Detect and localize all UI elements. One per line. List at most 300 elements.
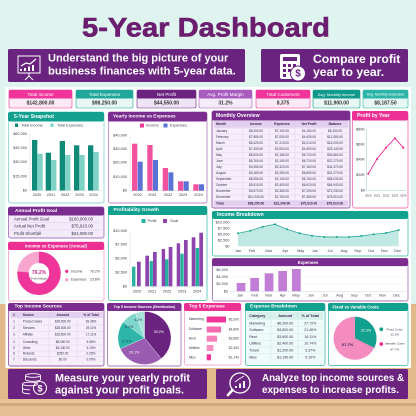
- axis labels: Feb: [249, 249, 255, 253]
- table: 5.10%: [305, 355, 316, 359]
- table: $28,600.00: [55, 326, 71, 330]
- banner: compare profit: Compare profit: [313, 52, 400, 66]
- table: $2,280.00: [275, 171, 289, 175]
- axis labels: 2022: [383, 193, 390, 197]
- panel: expense breakdown: Expense Breakdown: [250, 304, 297, 310]
- table: February: [216, 135, 229, 139]
- axis labels: 2023: [178, 289, 186, 293]
- KPI: total customers: [256, 90, 310, 108]
- banner: big picture: [8, 49, 245, 82]
- axis labels: Sep: [351, 294, 358, 298]
- table: $2,150.00: [275, 159, 289, 163]
- panel: yearly income vs expenses: Yearly Income vs Expenses: [113, 113, 176, 119]
- KPI: average monthly income: [313, 90, 360, 108]
- axis labels: 2021: [148, 193, 157, 197]
- legend: [142, 219, 178, 223]
- panel: expense breakdown: [245, 303, 325, 366]
- table: September: [216, 177, 231, 181]
- axis labels: $2,500: [115, 270, 127, 274]
- axis labels: 2020: [133, 289, 141, 293]
- legend: Expenses: [71, 278, 87, 282]
- panel: fixed vs variable costs: [328, 303, 408, 366]
- table: Marketing: [249, 321, 265, 325]
- table: $9,670.00: [249, 189, 263, 193]
- table: $4,130.00: [56, 346, 70, 350]
- table: Services: [23, 326, 35, 330]
- table: 21.46%: [304, 328, 317, 332]
- axis labels: Dec: [393, 294, 400, 298]
- axis labels: 2020: [365, 193, 372, 197]
- legend: Income: [146, 124, 159, 128]
- table: 7: [13, 358, 15, 362]
- KPI: net profit: Net Profit: [157, 92, 177, 97]
- table: $4,150.00: [302, 129, 316, 133]
- table: $6,760.00: [302, 177, 316, 181]
- panel: top income sources: Top Income Sources: [14, 304, 62, 310]
- axis labels: 2022: [61, 193, 69, 197]
- panel: income vs expenses donut: Income vs Expenses (Annual): [25, 244, 88, 248]
- panel: top 5 expenses: Top 5 Expenses: [189, 304, 225, 310]
- panel: fixed vs variable costs: Fixed vs Variable Costs: [332, 304, 379, 310]
- table: Other: [23, 346, 31, 350]
- axis labels: $40K: [356, 158, 365, 162]
- table: % of Total: [302, 314, 319, 318]
- table: $51,270.00: [327, 171, 343, 175]
- banner: compare profit: [261, 49, 408, 82]
- table: $2,760.00: [275, 195, 289, 199]
- table: 3: [13, 333, 15, 337]
- axis labels: $30,000: [13, 160, 27, 164]
- panel: 5-year snapshot: [8, 112, 104, 203]
- pie chart: 39.2%: [154, 330, 165, 334]
- axis labels: 2023: [392, 193, 399, 197]
- table: $16,800.00: [55, 333, 71, 337]
- panel: top 5 income sources pie: Top 5 Income Sources (Distribution): [114, 305, 176, 309]
- table: Balance: [329, 122, 341, 126]
- bar chart: expenses by category: $1,140: [229, 355, 239, 359]
- table: Amount: [278, 314, 293, 318]
- table: $8,420.00: [249, 141, 263, 145]
- axis labels: 2021: [374, 193, 381, 197]
- axis labels: [113, 229, 202, 293]
- table: 9.06%: [87, 340, 96, 344]
- table: $2,185.00: [275, 153, 289, 157]
- table: $2,400.00: [275, 183, 289, 187]
- banner: analyze income and expenses: expenses to increase profits.: [262, 385, 399, 396]
- table: Misc: [249, 355, 257, 359]
- table: 10.74%: [304, 342, 317, 346]
- bar chart: expenses by category: Rent: [189, 337, 196, 341]
- table: $4,500.00: [302, 147, 316, 151]
- panel: expenses: [212, 258, 408, 301]
- axis labels: [356, 128, 407, 197]
- axis labels: 2024: [193, 289, 202, 293]
- table: July: [216, 165, 222, 169]
- KPI: total customers: Total Customers: [266, 92, 300, 97]
- panel: profit by year: Profit by Year: [357, 113, 390, 119]
- title: 5-Year Dashboard: [82, 13, 330, 42]
- axis labels: Jun: [308, 294, 314, 298]
- legend: Fixed Costs: [387, 327, 403, 331]
- icon: magnifier with chart: [228, 373, 250, 395]
- panel: annual profit goal: Profit Shortfall: [14, 231, 41, 236]
- icon: calculator with dollar coin: [280, 54, 306, 81]
- axis labels: $40,000: [113, 134, 127, 138]
- table: Travel: [249, 348, 259, 352]
- table: $37,270.00: [327, 159, 343, 163]
- axis labels: $5,000: [115, 256, 127, 260]
- axis labels: $4,000: [216, 275, 228, 279]
- panel: income breakdown: [212, 211, 408, 256]
- table: 1: [13, 320, 15, 324]
- KPI: average monthly income: $11,900.00: [324, 100, 349, 106]
- panel: annual profit goal: $100,000.00: [69, 216, 94, 222]
- axis labels: 2020: [33, 193, 41, 197]
- table: $9,510.00: [249, 183, 263, 187]
- axis labels: $0: [123, 284, 127, 288]
- axis labels: $60K: [356, 143, 365, 147]
- table: $2,400.00: [277, 342, 293, 346]
- table: August: [216, 171, 226, 175]
- axis labels: $45,000: [13, 146, 27, 150]
- table: $75,910.00: [327, 195, 343, 199]
- table: 0.00%: [87, 358, 96, 362]
- table: $98,250.00: [248, 201, 264, 205]
- axis labels: Oct: [368, 249, 375, 253]
- table: $7,480.00: [302, 195, 316, 199]
- KPI: net profit: $44,550.00: [154, 100, 179, 106]
- KPI: average profit margin: 31.2%: [218, 100, 233, 106]
- table: $2,380.00: [275, 189, 289, 193]
- table: $58,030.00: [327, 177, 343, 181]
- pie chart: 29.1%: [129, 351, 140, 355]
- bar chart: expenses by category: Marketing: [189, 317, 204, 321]
- legend: [15, 123, 83, 127]
- table: 2: [13, 326, 15, 330]
- table: $9,180.00: [249, 171, 263, 175]
- panel: income vs expenses donut: [8, 242, 104, 301]
- table: 0.25%: [87, 352, 96, 356]
- table: Source: [23, 313, 34, 317]
- table: $2,000.00: [275, 147, 289, 151]
- KPI: average monthly expenses: $8,187.50: [374, 100, 397, 106]
- legend: 23.8%: [90, 278, 100, 282]
- bar chart: expenses by category: Misc: [189, 355, 196, 359]
- table: $6,150.00: [328, 129, 342, 133]
- table: $12,080.00: [327, 135, 343, 139]
- KPI: net profit: [137, 90, 196, 108]
- table: Software: [249, 328, 263, 332]
- panel: monthly overview: Monthly Overview: [216, 113, 260, 119]
- table: Consulting: [23, 340, 38, 344]
- banner: big picture: business finances with 5-year data.: [48, 66, 236, 78]
- axis labels: Sep: [354, 249, 361, 253]
- legend: Total Income: [21, 123, 43, 127]
- table: 4: [13, 340, 15, 344]
- icon: coins with dollar: $: [37, 384, 43, 394]
- axis labels: $60,000: [13, 132, 27, 136]
- panel: annual profit goal: Actual Net Profit: [14, 224, 46, 228]
- axis labels: Nov: [379, 294, 386, 298]
- axis labels: $30,000: [113, 147, 127, 151]
- table: $8,760.00: [249, 159, 263, 163]
- KPI: total expenses: $98,250.00: [92, 100, 117, 106]
- KPI: total income: Total Income: [27, 92, 54, 97]
- axis labels: Jan: [235, 249, 241, 253]
- table: 6: [13, 352, 15, 356]
- banner: measure profit: Measure your yearly profit: [55, 372, 190, 384]
- table: October: [216, 183, 227, 187]
- table: $9,450.00: [249, 165, 263, 169]
- table: Utilities: [249, 342, 261, 346]
- panel: annual profit goal: [8, 207, 104, 238]
- bar chart: expenses by category: Software: [189, 327, 202, 331]
- panel: annual profit goal: $24,090.00: [71, 231, 94, 236]
- axis labels: $0: [23, 188, 27, 192]
- axis labels: Apr: [282, 249, 289, 253]
- axis labels: $15,000: [13, 174, 27, 178]
- table: Product Sales: [23, 320, 43, 324]
- KPI: average profit margin: Avg. Profit Margin: [207, 92, 244, 97]
- KPI: average profit margin: [199, 90, 252, 108]
- table: Income: [250, 122, 262, 126]
- table: $72,230.00: [327, 189, 343, 193]
- axis labels: 2021: [47, 193, 55, 197]
- pie chart: 4.2%: [134, 318, 143, 322]
- panel: top 5 expenses: [184, 303, 241, 365]
- table: $7,210.00: [275, 141, 289, 145]
- pie chart: [334, 317, 377, 360]
- table: Month: [216, 122, 226, 126]
- banner: measure profit: [8, 369, 207, 399]
- KPI: total customers: 8,375: [277, 100, 289, 106]
- table: January: [216, 129, 228, 133]
- table: Rent: [249, 335, 257, 339]
- axis labels: $0: [225, 244, 230, 248]
- bar chart: expenses by category: $4,800: [229, 328, 239, 332]
- table: $8,900.00: [56, 340, 70, 344]
- panel: annual profit goal: Annual Profit Goal: [15, 208, 57, 214]
- axis labels: 2024: [400, 193, 407, 197]
- axis labels: Feb: [251, 294, 258, 298]
- axis labels: 2024: [194, 193, 204, 197]
- axis labels: $80K: [356, 128, 365, 132]
- bar chart: expenses: [237, 269, 301, 291]
- pie chart: 9.1%: [125, 325, 134, 329]
- icon: coins with dollar: [22, 374, 46, 394]
- banner: compare profit: year to year.: [313, 65, 384, 79]
- axis labels: Dec: [394, 249, 401, 253]
- pie chart: 17.1%: [122, 339, 133, 343]
- axis labels: Jun: [312, 249, 318, 253]
- bar chart: expenses by category: $2,400: [229, 346, 239, 350]
- table: $16,290.00: [327, 141, 343, 145]
- axis labels: $10,000: [113, 229, 127, 233]
- axis labels: Mar: [265, 294, 273, 298]
- axis labels: Nov: [381, 249, 388, 253]
- legend: 32.3%: [390, 333, 399, 337]
- bar chart: expenses by category: Utilities: [189, 346, 200, 350]
- axis labels: [216, 221, 401, 253]
- axis labels: $0: [123, 189, 127, 193]
- axis labels: 2023: [75, 193, 84, 197]
- table: $7,050.00: [275, 135, 289, 139]
- table: $7,980.00: [249, 135, 263, 139]
- bar chart: expenses by category: $6,200: [229, 318, 239, 322]
- table: [214, 121, 348, 206]
- table: $75,910.00: [301, 201, 317, 205]
- table: $2,190.00: [275, 177, 289, 181]
- table: [247, 312, 323, 362]
- table: $250.00: [57, 352, 69, 356]
- table: 4.19%: [87, 346, 96, 350]
- table: $8,900.00: [249, 153, 263, 157]
- table: 16.11%: [304, 335, 317, 339]
- panel: income breakdown: Income Breakdown: [217, 212, 264, 218]
- legend: Income: [71, 269, 83, 273]
- table: 17.11%: [86, 333, 96, 337]
- legend: [65, 269, 100, 282]
- legend: Total Expenses: [57, 123, 83, 127]
- axis labels: $20K: [356, 173, 365, 177]
- axis labels: May: [292, 294, 300, 298]
- table: 27.72%: [304, 321, 317, 325]
- KPI: total income: [9, 90, 72, 108]
- table: $1,140.00: [277, 355, 293, 359]
- axis labels: 2023: [179, 193, 187, 197]
- axis labels: 2022: [163, 289, 171, 293]
- table: March: [216, 141, 225, 145]
- table: $6,710.00: [302, 159, 316, 163]
- table: $4,930.00: [302, 135, 316, 139]
- panel: 5-year snapshot: 5-Year Snapshot: [14, 114, 54, 120]
- table: % of Total: [83, 313, 99, 317]
- table: $8,250.00: [249, 129, 263, 133]
- table: $1,200.00: [277, 348, 293, 352]
- table: 39.38%: [86, 320, 97, 324]
- legend: 76.2%: [90, 269, 100, 273]
- donut chart: 76.2%: [32, 270, 47, 276]
- table: $7,160.00: [302, 165, 316, 169]
- KPI: total expenses: [76, 90, 133, 108]
- area chart: income: [237, 223, 400, 246]
- table: $44,370.00: [327, 165, 343, 169]
- table: 5: [13, 346, 15, 350]
- icon: calculator with dollar coin: $: [295, 68, 301, 80]
- panel: yearly income vs expenses: [108, 112, 207, 203]
- KPI: average monthly income: Avg. Monthly Income: [318, 92, 356, 97]
- table: $28,500.00: [55, 320, 71, 324]
- table: $30,660.00: [327, 153, 343, 157]
- table: $6,720.00: [302, 153, 316, 157]
- KPI: average monthly expenses: Avg. Monthly Expenses: [367, 92, 404, 96]
- axis labels: $0: [361, 189, 365, 193]
- table: $75,910.00: [327, 201, 343, 205]
- table: $6,890.00: [302, 171, 316, 175]
- table: Affiliate: [23, 333, 33, 337]
- axis labels: [13, 132, 99, 197]
- KPI: total income: $142,800.00: [27, 100, 55, 106]
- axis labels: $2,000: [216, 282, 228, 286]
- axis labels: $10,000: [113, 175, 127, 179]
- axis labels: May: [297, 249, 304, 253]
- banner: big picture: Understand the big picture of your: [48, 52, 229, 64]
- table: Expenses: [274, 122, 290, 126]
- banner: analyze income and expenses: Analyze top income sources &: [262, 373, 404, 384]
- table: [10, 312, 102, 362]
- bar chart: expenses by category: $3,600: [229, 337, 239, 341]
- table: #: [13, 313, 15, 317]
- banner: measure profit: against your profit goals.: [55, 384, 184, 396]
- bar chart: income and expenses: [32, 140, 99, 190]
- axis labels: 2024: [89, 193, 99, 197]
- table: April: [216, 147, 223, 151]
- axis labels: Oct: [365, 294, 372, 298]
- table: $4,800.00: [277, 328, 293, 332]
- axis labels: $6,000: [216, 268, 228, 272]
- legend: Expenses: [170, 124, 187, 128]
- axis labels: $7,500: [115, 243, 127, 247]
- axis labels: $7,500: [218, 227, 230, 231]
- table: 5.37%: [305, 348, 316, 352]
- KPI: total expenses: Total Expenses: [89, 92, 121, 97]
- axis labels: $2,500: [218, 238, 230, 242]
- table: June: [216, 159, 223, 163]
- bar chart: income and expenses: [132, 144, 204, 191]
- legend: [140, 124, 187, 128]
- panel: top income sources: [8, 303, 104, 366]
- table: Discounts: [23, 358, 37, 362]
- table: May: [216, 153, 222, 157]
- table: Amount: [56, 313, 70, 317]
- table: Refunds: [23, 352, 35, 356]
- axis labels: $10,000: [216, 221, 230, 225]
- legend: 67.7%: [390, 347, 399, 351]
- panel: annual profit goal: $75,910.00: [71, 224, 94, 228]
- axis labels: Aug: [341, 249, 347, 253]
- table: Net Profit: [302, 122, 317, 126]
- icon: presentation board chart: [18, 56, 40, 80]
- axis labels: Apr: [280, 294, 286, 298]
- axis labels: Jul: [323, 294, 328, 298]
- axis labels: Jan: [237, 294, 243, 298]
- panel: annual profit goal: Annual Profit Goal: [14, 216, 49, 222]
- panel: profitability growth: [108, 206, 207, 300]
- axis labels: 2022: [164, 193, 172, 197]
- axis labels: Aug: [336, 294, 343, 298]
- table: $22,340.00: [274, 201, 290, 205]
- bar chart: profit and goal: [132, 233, 203, 286]
- table: $6,200.00: [277, 321, 293, 325]
- axis labels: 2021: [148, 289, 156, 293]
- table: $8,950.00: [249, 177, 263, 181]
- table: $64,940.00: [327, 183, 343, 187]
- legend: Profit: [148, 219, 157, 223]
- table: November: [216, 189, 230, 193]
- table: December: [216, 195, 230, 199]
- bar chart: expenses by category: [189, 316, 239, 360]
- legend: Goal: [170, 219, 178, 223]
- donut chart: [23, 257, 55, 289]
- table: $2,320.00: [275, 165, 289, 169]
- legend: Variable Costs: [385, 342, 405, 346]
- line chart: profit: [367, 137, 404, 175]
- table: Total: [216, 201, 224, 205]
- panel: profit by year: [352, 111, 408, 208]
- panel: monthly overview: [212, 111, 350, 208]
- table: $6,910.00: [302, 183, 316, 187]
- axis labels: [113, 134, 204, 197]
